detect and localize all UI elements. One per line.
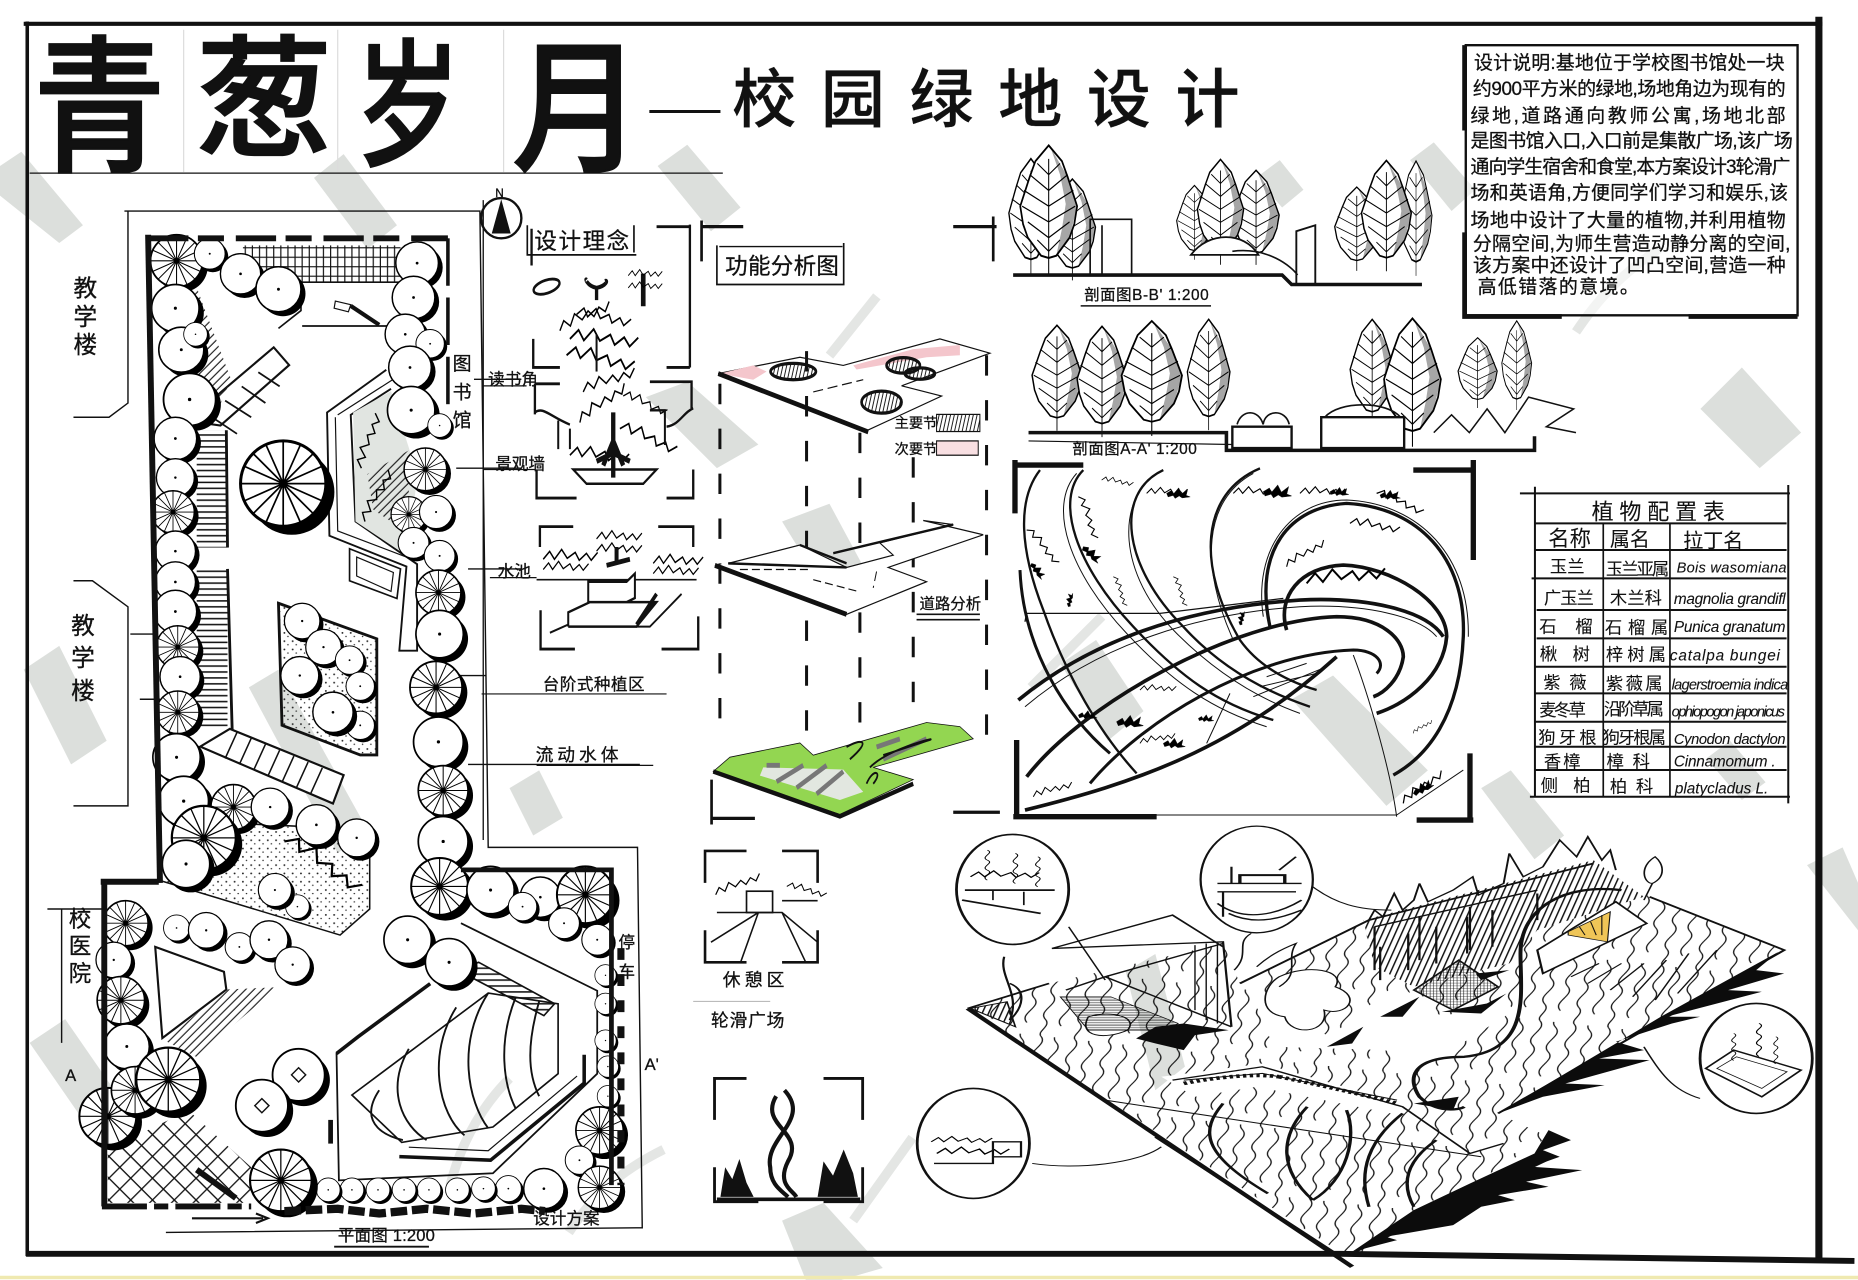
table body: catalpa bungei [1670,648,1781,665]
table body: 沿阶草属 [1604,699,1664,719]
table body: 紫薇 [1543,672,1587,692]
callout circle: section [917,1088,1029,1198]
plan: building labels: 学 [71,645,95,672]
axon: shrub clouds [1086,910,1717,1036]
title [33,26,642,192]
section tree cluster right [1335,161,1432,276]
axon: central raised bed [1414,960,1498,1010]
axon: pavilion upper left [1052,915,1231,1030]
concept labels: 读书角 [488,370,538,389]
analysis heading [717,243,844,285]
table body: 玉兰 [1550,557,1585,577]
perspective sweeping strips [1018,468,1468,817]
axon: sculpture left [1003,957,1021,1020]
table body: 樟科 [1607,751,1650,771]
axon: ground texture [968,860,1784,1260]
analysis heading: 功能分析图 [725,254,839,279]
panel: design concept [482,200,703,840]
section caption [1029,440,1232,458]
plan: building labels: 校 [69,907,91,932]
plan: building labels: 停 [619,933,635,952]
plan: building labels: 书 [453,381,472,403]
concept labels: 水池 [498,562,531,581]
panel: design description: 设计说明:基地位于学校图书馆处一块 [1474,52,1785,74]
table body: 石榴属 [1605,617,1668,637]
plan: building labels: A' [645,1055,659,1074]
sketch: rest area: 休憩区 [723,970,784,990]
table body: 狗牙根属 [1603,727,1666,747]
compass: north arrow: N [495,186,504,200]
plan: surrounding buildings and dimension lines [47,211,642,1232]
panel: design description: 绿地,道路通向教师公寓,场地北部 [1471,105,1786,127]
panel: design description: 约900平方米的绿地,场地角边为现有的 [1473,78,1786,100]
table body: magnolia grandifl [1674,591,1786,608]
plan: building labels: 设计方案 [533,1209,600,1228]
section ground and planters [1029,397,1576,450]
axon: callout connectors [1032,887,1700,1166]
perspective frame corners [1013,460,1473,820]
plan: building labels: 车 [619,963,635,982]
panel: design description: 场地中设计了大量的植物,并利用植物 [1471,209,1786,231]
plan: lower plaza shapes [108,824,370,1223]
plan: scale caption: 平面图 1:200 [338,1226,435,1245]
plan: building labels: 院 [69,961,91,986]
plan: building labels: 楼 [73,332,97,359]
axon: hatched corner [971,1002,1015,1027]
site plan [47,211,659,1247]
axon: plaza arcs [1173,1067,1504,1207]
analysis: legend and road labels: 道路分析 [920,595,981,613]
subtitle: 校园绿地设计 [732,64,1239,136]
compass: north arrow [481,186,521,238]
section ground line [1013,219,1422,285]
plant table [1520,485,1790,803]
table body: ophiopogon japonicus [1672,705,1786,721]
analysis: exploded layers [702,216,1000,825]
table body: 梓树属 [1606,645,1666,665]
plan: skating plaza [331,923,597,1180]
table body: Punica granatum [1674,619,1786,636]
axon: upper pergola with yellow wall [1375,857,1662,973]
plan: paved and stepped areas [187,245,403,804]
section tree cluster left [1009,145,1095,280]
panel: design description: 是图书馆入口,入口前是集散广场,该广场 [1471,130,1793,152]
axon: winding path [1414,889,1621,1109]
table body: 楸树 [1540,644,1590,664]
section trees right [1350,318,1532,447]
table body: 侧柏 [1541,776,1591,796]
title: 葱 [196,26,333,174]
section B-B' [1009,145,1432,306]
table body: 玉兰亚属 [1606,559,1669,579]
panel: design description: 通向学生宿舍和食堂,本方案设计3轮滑广 [1471,156,1790,178]
callout circle: planting [956,834,1069,944]
axon: main outline [968,863,1784,1267]
panel: design description: 高低错落的意境。 [1478,276,1639,298]
perspective drawing: skating plaza [1013,460,1473,820]
concept labels [488,370,645,765]
table body [1538,557,1788,797]
panel: design description: 场和英语角,方便同学们学习和娱乐,该 [1471,182,1788,204]
plan: building labels: 教 [73,275,97,302]
section caption: 剖面图A-A' 1:200 [1072,440,1197,458]
plan: planter bed [278,603,377,755]
plan: building labels: 学 [73,304,97,331]
plan: building labels: 馆 [453,410,472,432]
table grid [1520,485,1790,803]
table body: Bois wasomiana [1677,561,1787,577]
callout circle: planter [1700,1003,1812,1113]
table body: 香樟 [1544,751,1581,771]
title: 青 [33,26,166,192]
plan: building labels: 教 [71,613,95,640]
plan: trees [79,235,628,1217]
table body: 木兰科 [1610,588,1662,608]
table body: 狗牙根 [1538,727,1597,747]
section tree cluster centre [1177,159,1279,265]
section A-A' [1029,318,1576,458]
analysis: legend and road labels [895,415,981,613]
label: skating plaza [693,1001,784,1030]
panel: design description: 分隔空间,为师生营造动静分离的空间, [1473,233,1790,255]
table body: 麦冬草 [1539,700,1586,720]
plan: hexagonal water pool [327,370,417,651]
axon: top edge spikes [1369,837,1616,920]
title: 岁 [355,31,460,186]
table body: 紫薇属 [1606,673,1663,693]
label: skating plaza: 轮滑广场 [711,1010,784,1030]
aerial axonometric view [917,826,1812,1267]
panel: design description: 该方案中还设计了凹凸空间,营造一种 [1473,254,1786,276]
sketch: rest area [705,851,827,990]
table header row [1548,527,1743,552]
panel: design description [1465,45,1798,317]
concept labels: 台阶式种植区 [543,675,645,694]
plan: boundary walls [101,235,621,1214]
analysis: legend and road labels: 主要节 [895,415,937,432]
table header row: 名称 [1548,527,1591,551]
table body: platycladus L. [1674,780,1768,797]
table body: 石榴 [1539,617,1593,637]
analysis: legend and road labels: 次要节 [895,441,937,458]
axon: shadows [1136,952,1784,1252]
table header row: 属名 [1610,528,1650,551]
table body: Cynodon dactylon [1674,732,1786,748]
panel: function analysis [702,216,1000,825]
table body: 广玉兰 [1544,588,1594,608]
plan: building labels: A [65,1066,77,1085]
perspective shrubs [1026,475,1445,804]
table body: lagerstroemia indica [1672,677,1788,693]
table body: 柏科 [1610,777,1653,797]
table body: Cinnamomum . [1674,754,1776,771]
section caption: 剖面图B-B' 1:200 [1084,286,1209,304]
table header row: 拉丁名 [1683,529,1743,552]
concept labels: 景观墙 [495,454,545,473]
table title: 植物配置表 [1592,499,1725,524]
concept heading: 设计理念 [534,229,629,254]
callout circle: bench [1201,826,1313,933]
section trees left [1032,319,1230,437]
plan: building labels [65,275,659,1228]
concept sketches [482,200,703,840]
title: 月 [512,30,642,192]
plan: building labels: 医 [69,934,91,959]
plan: building labels: 图 [453,354,472,375]
plan: feature tree [241,441,334,535]
plan: building labels: 楼 [71,678,95,705]
sketch: flowing water flame sculpture [715,1078,863,1202]
concept labels: 流动水体 [536,745,619,765]
